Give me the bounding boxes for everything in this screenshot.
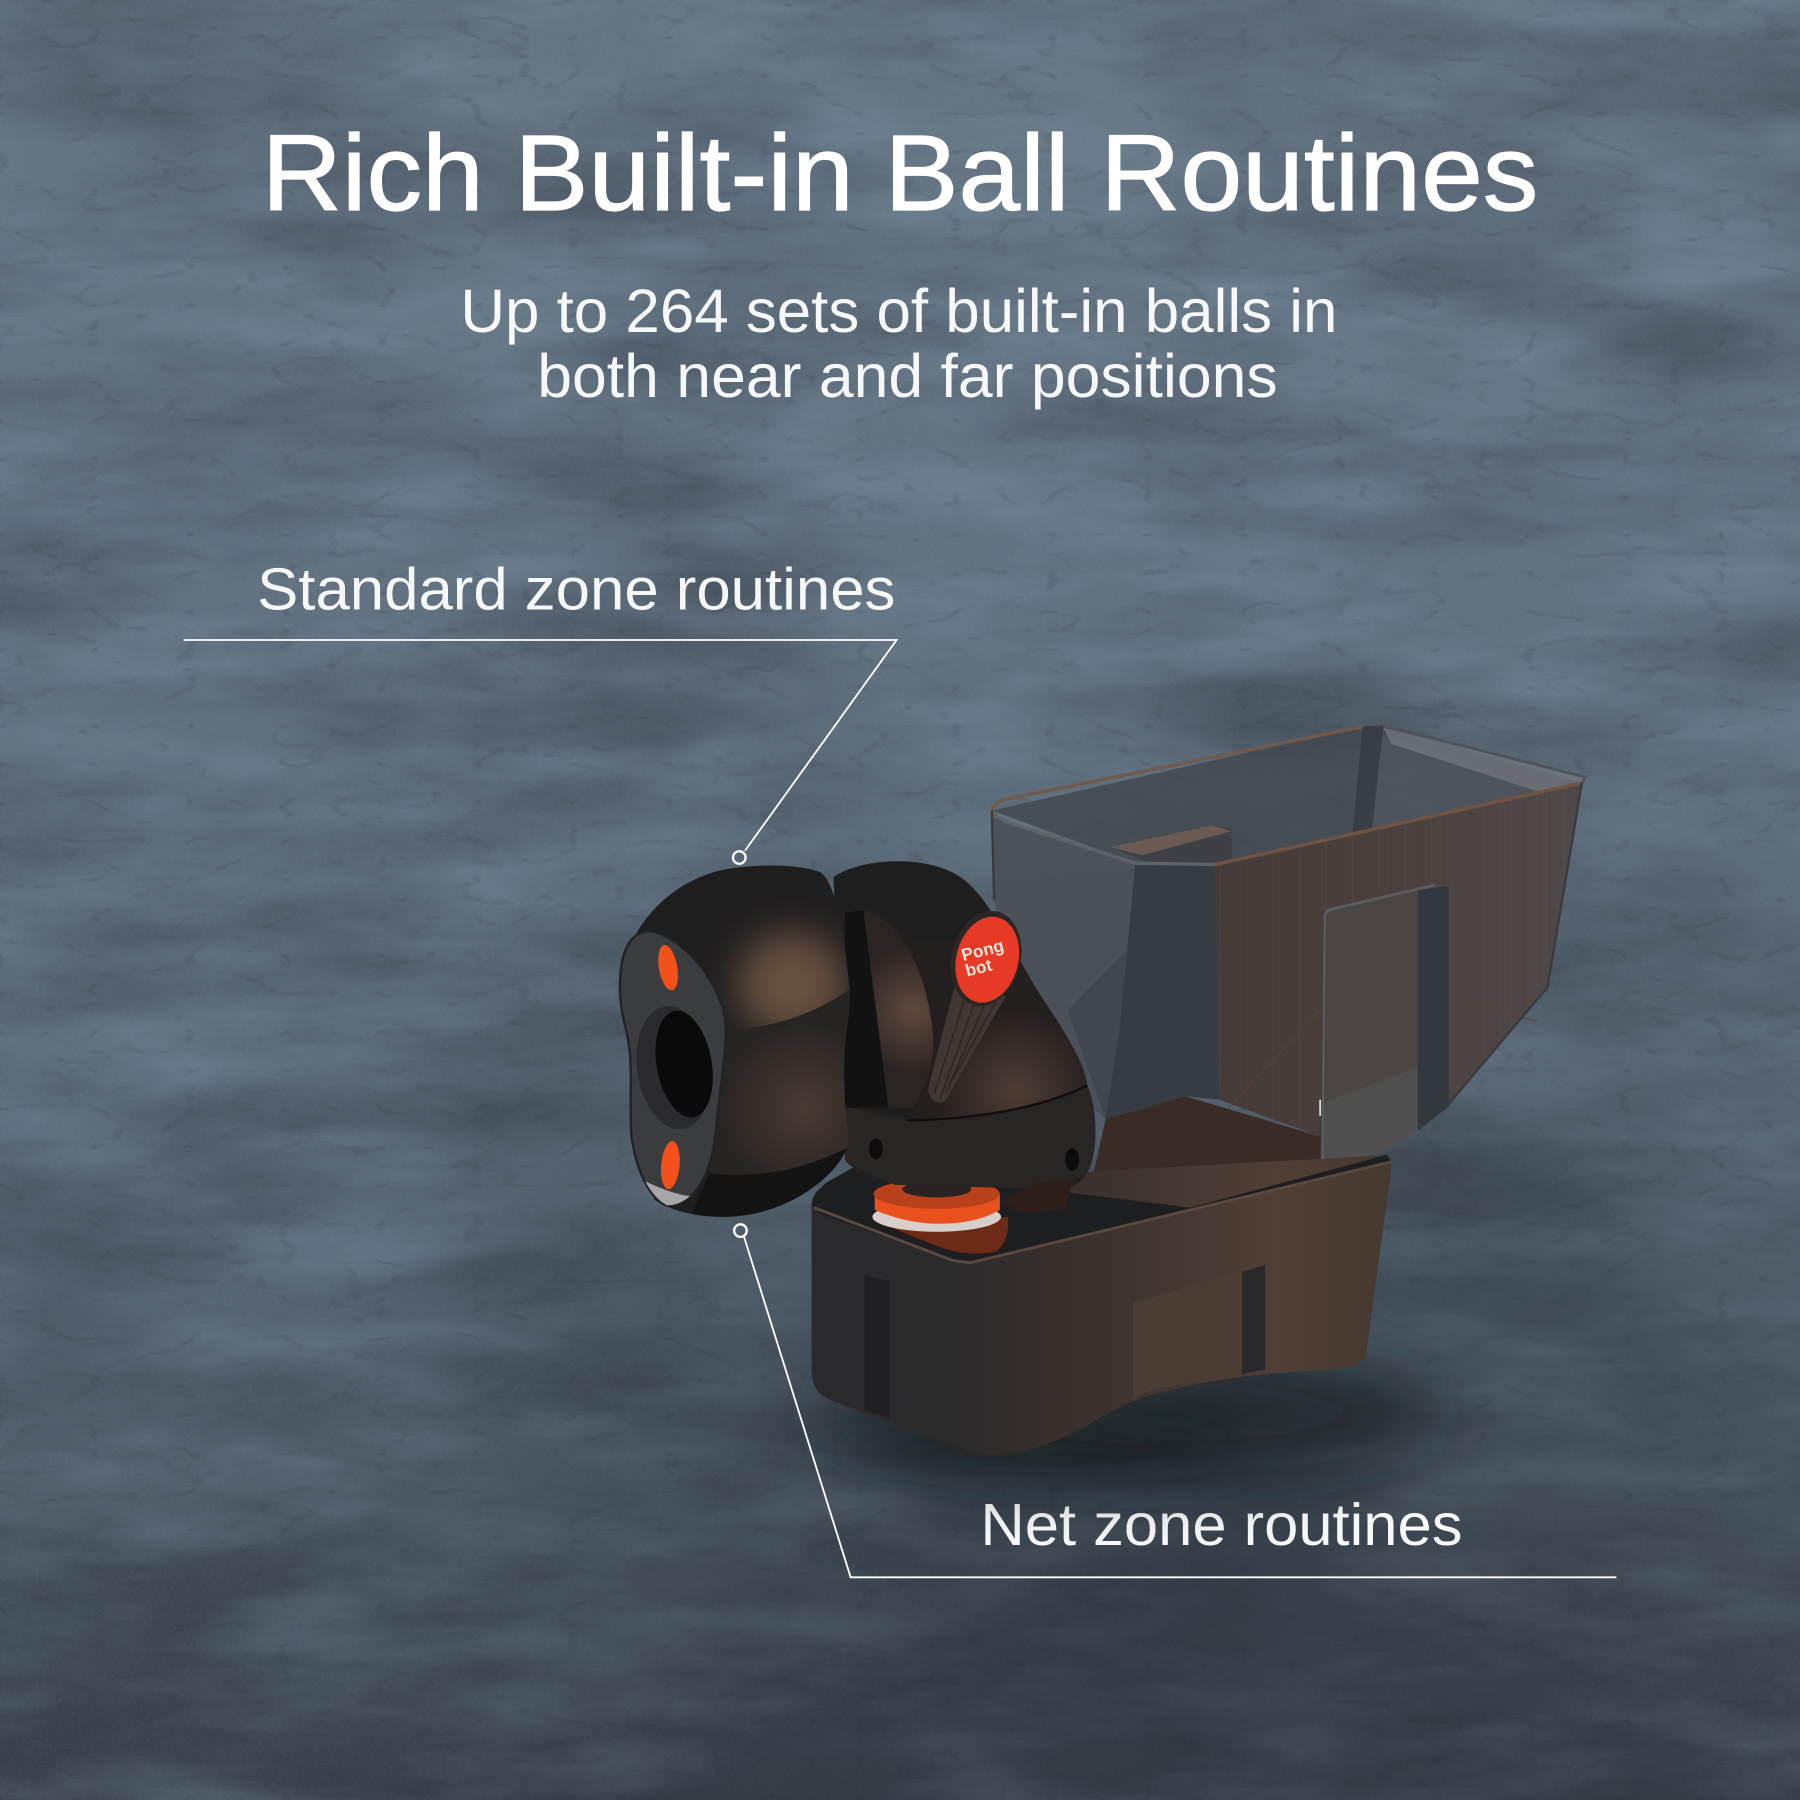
label: net zone routines: Net zone routines (980, 1491, 1462, 1558)
hopper floor (1093, 1096, 1320, 1200)
lever with logo badge (928, 903, 1031, 1103)
logo text (959, 935, 1010, 981)
title: Rich Built-in Ball Routines (262, 112, 1538, 233)
subtitle (460, 277, 1337, 410)
product: ball robot (620, 726, 1585, 1456)
hopper: transparent ball container (992, 726, 1585, 1210)
label: standard zone routines: Standard zone routines (257, 556, 895, 623)
logo text: bot (963, 955, 994, 981)
hopper handle (1110, 825, 1232, 863)
callout line: net zone (734, 1224, 1616, 1577)
callout line: standard zone (184, 640, 897, 864)
launcher face plate (620, 931, 726, 1207)
base: black-brown housing (812, 1155, 1391, 1456)
orange indicator bottom (659, 1140, 682, 1190)
logo text: Pong (959, 935, 1006, 965)
hopper middle strip (1105, 863, 1219, 1119)
white reflection (645, 1181, 690, 1205)
subtitle: Up to 264 sets of built-in balls in (460, 277, 1337, 345)
launcher opening (629, 1001, 719, 1134)
hopper rims (1216, 783, 1582, 864)
hopper back wall (992, 726, 1582, 864)
device shadow (804, 1349, 1446, 1475)
hopper inset window (1322, 885, 1451, 1169)
hopper left face (992, 816, 1135, 1119)
subtitle: both near and far positions (537, 342, 1278, 410)
head: ball launcher (620, 865, 855, 1221)
elbow: rotating neck (833, 861, 1102, 1212)
orange indicator top (655, 944, 681, 992)
hopper front-right panel (1216, 783, 1582, 1166)
adjustment knob (872, 1179, 1008, 1254)
